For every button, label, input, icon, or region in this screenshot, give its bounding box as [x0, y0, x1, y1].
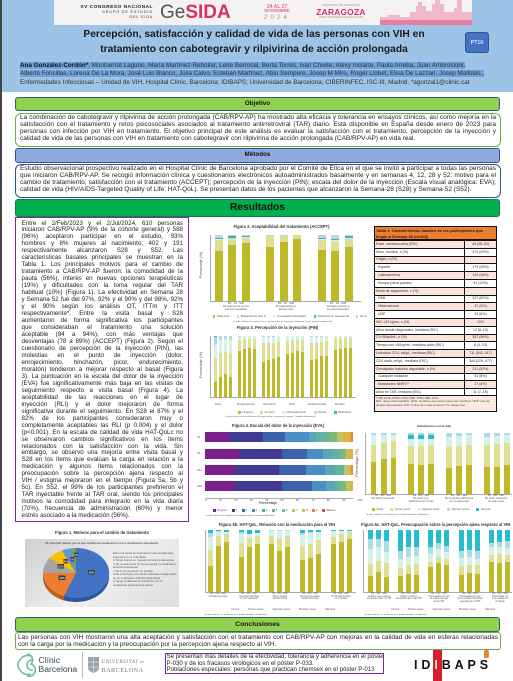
- heading: Conclusiones: Conclusiones: [235, 621, 280, 628]
- figure 4: x axis and row labels: [197, 436, 362, 505]
- table 1 rows: 373 (93%): [472, 250, 489, 254]
- table 1 rows: Sexo, hombre, n (%): [376, 250, 408, 254]
- figure 5a: group labels: satisfecho/a con la vida: [409, 500, 433, 503]
- banner: dates: 24 AL 27: [267, 4, 287, 10]
- table 1 rows: 387 (96%): [472, 335, 489, 339]
- figure 5c: stacked bar chart: [363, 530, 512, 593]
- table 1 rows: Latinoamérica: [378, 273, 400, 277]
- figure 5b: group labels: en el horario: [335, 598, 347, 600]
- figure 5c: group labels: Miedo a contar a: [400, 596, 418, 598]
- figure 3: y axis title: Porcentaje (%): [198, 352, 203, 378]
- poster code PT10: PT10: [471, 40, 483, 46]
- figure 5c: group labels: los demás sobre mi VIH: [367, 598, 391, 600]
- panel: results text: respectivamente alcanzaron S28 y S52. Las: [22, 247, 183, 254]
- figure 5c title: Figura 5c. HAT-QoL. Preocupación sobre la percepción ajena respecto al VIH: [361, 522, 510, 527]
- figure 4: x axis and row labels: T0: [197, 436, 200, 439]
- table 1 header: Tabla 1. Características basales de los participantes que: [376, 228, 483, 232]
- figure 5b: legend: Nunca Pocas veces Algunas veces Muchas veces Siempre: [232, 608, 335, 611]
- figure 3: stacked bar chart: [210, 336, 356, 398]
- figure 3: group labels: Enrojecimiento: [237, 403, 255, 406]
- panel: results text: 5c). En S52, el 99% de los participantes prefirieron el: [22, 484, 183, 491]
- figure 5c: group labels: se enteren de que: [430, 598, 448, 600]
- figure 5a: group labels: Me disfruto de la vida: [372, 497, 394, 500]
- table 1 footnote: *100I,101E,106M/I,108I,138K,179D,188L,230L.: [376, 396, 439, 400]
- table 1 rows: Edad, mediana años (RIC): [376, 242, 417, 246]
- table 1 rows: Mutaciones NNRTI*: [378, 382, 409, 386]
- figure 5b: group labels: B0 · S12 · S28: [272, 593, 288, 595]
- figure 4: horizontal stacked bar chart: [205, 432, 353, 491]
- table 1 rows: CD4 nadir, cél/μL, mediana (RIC): [376, 359, 428, 363]
- figure 3: group labels: Moratón: [335, 403, 345, 406]
- figure 2: stacked bar chart: [210, 235, 361, 302]
- figure 3: group labels: Picor: [289, 403, 295, 406]
- pie chart: 5%: [70, 557, 75, 561]
- panel: results text: desventajas (78 a 89%) (ACCEPT) (Figura 2). Según el: [22, 338, 183, 345]
- figure 5a: group labels: B0 · S12 · S28: [451, 494, 467, 497]
- IDIBAPS wordmark: IDIBAPS: [414, 658, 492, 672]
- figure 5c: group labels: B0 · S12 · S28: [431, 593, 447, 595]
- banner: congress name: DEL SIDA: [129, 15, 153, 19]
- banner: dates: 2024: [264, 14, 290, 21]
- banner: venue: [316, 3, 366, 19]
- figure 5a: footnote: *p valor relativo a la evolución en el tiempo (modelo multinomial): [366, 514, 428, 516]
- panel: results text: Entre el 2/Feb/2023 y el 2/Jul/2024, 610 personas: [22, 220, 183, 226]
- heading: Objetivo: Objetivo: [245, 100, 270, 107]
- panel: results text: tratamiento a CAB/RPV-AP fueron: la comodidad de la: [22, 268, 183, 275]
- banner: venue: WWW.CONGRESOGESIDA.COM: [319, 15, 363, 19]
- figure 5b: group labels: B0 · S12 · S28: [241, 593, 257, 595]
- table 1 rows: Años en TAR, mediana (RIC): [376, 390, 421, 394]
- panel: objective text: calidad de vida de las personas con VIH en tratamiento con cabotegravir con rilpivirina de acción prolongada (CAB/RPV-AP) en vida real.: [20, 135, 415, 142]
- figure 5a: group labels: B0 · S12 · S28: [488, 494, 504, 497]
- panel: results text: y Semana 52 fue del 97%, 92% y el 90% y del 98%, 92%: [22, 296, 183, 303]
- figure 5a: y axis title: Percentage (%): [354, 449, 359, 477]
- figure 2: legend: Totalmente Bastante/más bien sí Ni aceptable/inaceptable Totalmente en desacuerdo No sé: [217, 314, 367, 318]
- figure 3: legend: Ninguna Un poco Moderadamente Mucho Muchísimo: [242, 410, 351, 414]
- figure 4: footnote: *p valor relativo a la evolución en el tiempo sobre la intensidad del dolor: [205, 515, 275, 517]
- panel: results text: 82% de los participantes consideraron muy o: [22, 415, 183, 422]
- panel: results text: pauta (56%), interés en nuevas opciones terapéuticas: [22, 275, 183, 282]
- figure 2: y axis title: Porcentaje (%): [198, 252, 203, 278]
- panel: results text: iniciaron CAB/RPV-AP (9% de la cohorte general) y 588: [22, 226, 183, 233]
- panel: results text: enrojecimiento, hinchazón, picor, endurecimiento,: [22, 359, 183, 366]
- table 1 rows: Años desde diagnóstico, mediana (RIC): [376, 328, 438, 332]
- divider: [81, 652, 84, 678]
- banner: venue: AUDITORIO DE ZARAGOZA: [322, 3, 360, 7]
- figure 5a: group labels: de estar vivo/a: [488, 500, 504, 503]
- pie chart: 19%: [59, 576, 65, 580]
- panel: objective text: [15, 113, 501, 147]
- panel: results text: completamente aceptables las RLI (p 0.004) y el dolor: [22, 422, 183, 429]
- panel: results text: moratón) tendieron a mejorar respecto al basal (Figura: [22, 366, 183, 373]
- figure 5a: stacked bar chart: [365, 433, 512, 495]
- figure 2: group labels: [223, 302, 350, 311]
- banner: dates: NOVIEMBRE: [264, 8, 290, 13]
- authors and affiliations: Enfermedades Infecciosas – Unidad de VIH, Hospital Clínic, Barcelona; IDIBAPS; Universidad de Barcelona; CIBERINFEC, ISC-III, Madrid. *agonzal1@clinic.cat: [20, 79, 469, 86]
- poster code PT10: [465, 32, 489, 53]
- panel: methods text: que iniciaron CAB/RPV-AP. Se recogió información clínica y cuestionarios electrónicos autoadministrados basalmente y en semanas 4, 12, 28 y 52: motivo para el: [20, 172, 496, 179]
- figure 5a: group labels: [372, 494, 507, 503]
- figure 4: row T0: [205, 432, 353, 442]
- panel: results text: motivos la comodidad para integrarlo en la vida diaria: [22, 498, 183, 505]
- panel: results text: VIH / estigma mejoraron en el tiempo (Figura 5a, 5b y: [22, 477, 183, 484]
- figure 5c: group labels: los demás que tengo VIH: [396, 598, 422, 600]
- figure 5c: group labels: B0 · S12 · S28: [462, 593, 478, 595]
- figure 5a: group labels: B0 · S12 · S28: [375, 494, 391, 497]
- table 1 rows: IMC ≥30 kg/m², n (%): [376, 320, 409, 324]
- figure 2: group labels: B0 · S4 · S28: [330, 302, 346, 305]
- panel: results text: seguimiento respecto a visita basal (Figura 4). La: [22, 387, 183, 394]
- figure 5b: footnote: *p valor relativo a la evolución en el tiempo (modelo multinomial): [204, 614, 266, 616]
- figure 5b: group labels: Me ha preocupado: [300, 596, 320, 598]
- congress banner: [54, 0, 472, 25]
- callout: related posters: P-030 y de los fracasos virológicos en el póster P-033.: [166, 660, 314, 667]
- table 1 header: [374, 226, 497, 240]
- panel: methods text: calidad de vida (HIV/AIDS-Targeted Quality of Life: HAT-QoL). Se presentan datos de los pacientes que alcanzaron la Semana-28 (S28) y Semana-52 (S52).: [20, 186, 472, 193]
- figure 4: x axis and row labels: 0 10 20 30 40 50 60 70 80 90 100: [205, 498, 362, 502]
- panel: results text: preocupación sobre la percepción ajena respecto al: [22, 470, 183, 477]
- heading: Objetivo: [15, 97, 500, 111]
- figure 5c: legend: Nunca Pocas veces Algunas veces Muchas veces Siempre: [392, 608, 495, 611]
- icon: Clínic arcs: [17, 653, 36, 678]
- logo: IDIBAPS: [414, 650, 492, 681]
- panel: results text: aceptabilidad de las reacciones en el lugar de: [22, 394, 183, 401]
- table 1 rows: Fracaso virológico previo, n (%): [376, 398, 425, 402]
- figure 5c: group labels: el trabajo: [495, 601, 505, 603]
- table 1 rows: Modo de adquisición, n (%): [376, 289, 418, 293]
- table 1 rows: 45 (38–53): [472, 242, 489, 246]
- heading: Resultados: Resultados: [230, 202, 285, 213]
- callout: related posters: [164, 653, 384, 674]
- figure 5c: group labels: Preocupado por: [492, 596, 508, 598]
- red vertical bar: [433, 650, 442, 681]
- authors and affiliations: Ana González-Cordón*, Montserrat Laguno, María Martínez-Rebollar, Leire Berrocal, Berta Torres, Ivan Chivite, Alexy Inciarte, Paula Arreba, Juan Ambrosioni,: [20, 62, 465, 69]
- table 1 rows: 31 (8%): [474, 374, 487, 378]
- panel: objective text: La combinación de cabotegravir y rilpivirina de acción prolongada (CAB/RPV-AP) ha mostrado alta eficacia y tolerancia en ensayos clínicos, así como mejoría en la: [20, 114, 496, 121]
- panel: results text: cuestionario de percepción de la inyección (PIN), las: [22, 345, 183, 352]
- figure 5a: group labels: Me he sentido satisfecho/a: [445, 497, 473, 500]
- banner: venue: ZARAGOZA: [316, 7, 366, 17]
- panel: results text: (EVA) fue significativamente más baja en las visitas de: [22, 380, 183, 387]
- table 1 rows: 344 (229–477): [469, 359, 492, 363]
- figure 3 title: Figura 3. Percepción de la inyección (PIN): [237, 325, 318, 330]
- table 1 rows: HSH: [378, 296, 385, 300]
- banner: pink skyline: [380, 0, 472, 25]
- figure 5b: group labels: Cuando me tengo: [209, 596, 227, 598]
- heading: Resultados: [15, 199, 500, 217]
- pie chart subtitle: El principal motivo por el que cambia de medicación oral a medicación parenteral:: [45, 540, 159, 544]
- figure 4: x axis and row labels: S4: [197, 452, 200, 455]
- left page edge: [0, 0, 2, 681]
- pie chart legend: ■ Tengo interés en nuevas opciones terapéuticas: [113, 558, 174, 562]
- table 1 rows: 12 (8–19): [473, 328, 488, 332]
- pie chart: 56%: [89, 570, 95, 574]
- figure 5b: group labels: Me he sentido: [273, 596, 287, 598]
- figure 2: footnote: *p valor relativo a la evolución en el tiempo sobre la respuesta "totalmente" basal (modelo multinomial): [233, 320, 332, 322]
- panel: results text: Tabla 1. Los principales motivos para el cambio de: [22, 261, 183, 268]
- figure 5b: group labels: B0 · S12 · S28: [333, 593, 349, 595]
- panel: objective text: satisfacción con el tratamiento y retos psicosociales asociados al tratamiento antirretroviral (TAR) diario. Está disponible en España desde enero de 2023 para: [20, 121, 496, 128]
- panel: conclusions text: con la carga por la medicación y la preocupación por la percepción ajena respecto al VIH.: [18, 641, 276, 648]
- table 1 rows: CV<50cp/mL, n (%): [376, 335, 407, 339]
- heading: Métodos: Métodos: [245, 151, 270, 158]
- figure 5b: group labels: B0 · S12 · S28: [302, 593, 318, 595]
- table 1: baseline characteristics: [374, 226, 497, 412]
- table 1 rows: 711 (543–917): [469, 351, 492, 355]
- figure 5a: group labels: con mi vida actual: [449, 500, 469, 503]
- figure 5b: stacked bar chart: [205, 530, 356, 593]
- figure 5b: group labels: con la medicación: [240, 598, 258, 600]
- figure 5c: group labels: sepa algo de mi VIH: [460, 601, 480, 603]
- logo: Universitat de Barcelona: [82, 652, 145, 678]
- figure 5b title: Figura 5b. HAT-QoL. Relación con la medicación para el VIH: [219, 522, 335, 527]
- panel: methods text: [15, 164, 501, 198]
- panel: results text: y el 90% según los análisis OT, ITTm y ITT: [22, 303, 183, 310]
- banner: congress name: [80, 5, 153, 19]
- table 1 footnote: [374, 395, 497, 412]
- banner: congress name: XV CONGRESO NACIONAL: [80, 5, 153, 10]
- figure 5b: group labels: olvidar una toma: [302, 598, 318, 600]
- figure 5c: group labels: B0 · S12 · S28: [371, 593, 387, 595]
- panel: objective text: personas con infección por VIH en tratamiento. El objetivo principal de este análisis es evaluar la satisfacción con el tratamiento, percepción de la inyección y: [20, 128, 496, 135]
- pie chart legend: ■ Tengo problemas de tolerancia con mi medicación antirretroviral actual: [113, 579, 163, 586]
- university name: BARCELONA: [102, 667, 144, 674]
- figure 2: group labels: los inconvenientes: [327, 308, 349, 311]
- figure 2: group labels: B0 · S4 · S28: [228, 302, 244, 305]
- figure 5a: group labels: B0 · S12 · S28: [413, 494, 429, 497]
- table 1 rows: Linfocitos CD4, cél/μL, mediana (RIC): [376, 351, 435, 355]
- panel: results text: habitual (10%) (Figura 1). La efectividad en Semana 28: [22, 289, 183, 296]
- table 1 rows: 50 (12%): [473, 398, 488, 402]
- panel: results text: TAR inyectable frente al TAR oral, siendo los principales: [22, 491, 183, 498]
- table 1 rows: 17 (4%): [474, 382, 487, 386]
- figure 5b: group labels: desanimado/a: [273, 598, 287, 600]
- callout: related posters: Poblaciones especiales: personas que practican chemsex en el póster P-013: [166, 666, 374, 673]
- figure 2: group labels: Mi tratamiento es una: [223, 305, 249, 308]
- panel: results text: inyección (RLI) y el dolor mejoraron de forma: [22, 401, 183, 408]
- figure 2: group labels: Ventajas superan a: [326, 305, 350, 308]
- figure 5b: group labels: B0 · S12 · S28: [210, 593, 226, 595]
- logo: Clínic Barcelona: [17, 653, 78, 678]
- panel: results text: medicación y algunos ítems relacionados con la: [22, 463, 183, 470]
- figure 5c: group labels: si se enteran en: [492, 598, 508, 600]
- heading: Conclusiones: [15, 617, 500, 632]
- figure 5c: group labels: B0 · S12 · S28: [401, 593, 417, 595]
- table 1 footnote: RIC: rango intercuartílico; HSH: hombres que tienen sexo con hombres; UDP: uso de drogas parenterales; IMC: Índice de masa corporal; CV: carga viral: [376, 399, 489, 407]
- table 1 rows: 211 (52%): [473, 367, 488, 371]
- figure 2: group labels: B0 · S4 · S28: [278, 302, 294, 305]
- authors and affiliations: [20, 62, 484, 86]
- banner: GeSIDA wordmark: GeSIDA: [160, 2, 231, 23]
- pie chart legend: ■ Me preocupan los efectos adversos a largo plazo de mi medicación antirretroviral actual: [113, 572, 176, 580]
- figure 5c: group labels: tengo VIH: [434, 601, 444, 603]
- figure 5b: group labels: He tomado la dosis: [331, 596, 351, 598]
- table 1 rows: 24 (6%): [474, 312, 487, 316]
- figure 2: group labels: Mi tratamiento es: [276, 305, 296, 308]
- pie chart legend: ■ Me lo ha propuesto mi médico: [113, 568, 153, 572]
- figure 5a title: Satisfacción con la vida: [417, 424, 451, 428]
- panel: results text: (96%) aceptaron participar en el estudio, 93%: [22, 233, 183, 240]
- panel: results text: respectivamente*. Entre la visita basal y S28: [22, 310, 183, 317]
- title: Percepción, satisfacción y calidad de vida de las personas con VIH en: [83, 29, 425, 40]
- panel: results text: que consideraban el tratamiento una solución: [22, 324, 183, 331]
- table 1 rows: 51 (13%): [473, 281, 488, 285]
- pie chart: 8%: [64, 559, 68, 563]
- university name: UNIVERSITAT DE: [102, 659, 145, 665]
- figure 5a: group labels: Me siento muy: [413, 497, 429, 500]
- panel: results text: S28 en los ítems que evalúan la carga en relación a la: [22, 456, 183, 463]
- Clínic Barcelona wordmark: Clínic: [38, 654, 60, 664]
- figure 4: row S12: [205, 465, 353, 475]
- figure 5a: group labels: Me siento contento/a: [485, 497, 507, 500]
- figure 4: x axis and row labels: S28: [197, 485, 202, 488]
- panel: results text: [15, 217, 189, 522]
- Clínic Barcelona wordmark: Barcelona: [38, 664, 77, 674]
- table 1 rows: 327 (82%): [472, 296, 489, 300]
- panel: methods text: cambio de tratamiento; satisfacción con el tratamiento (ACCEPT); percepción de la inyección (PIN); escala del dolor de la inyección (Escala visual analógica: EVA);: [20, 179, 496, 186]
- banner: dates: [264, 4, 290, 21]
- panel: methods text: Estudio observacional prospectivo realizado en el Hospital Clínic de Barcelona aprobado por el Comité de Ética en el que se invitó a participar a todas las personas: [20, 165, 496, 172]
- panel: results text: embargo, se observó una mejoría entre visita basal y: [22, 449, 183, 456]
- table 1 rows: 37 (9%): [474, 304, 487, 308]
- panel: results text: aumentaron de forma significativa los participantes: [22, 317, 183, 324]
- pie chart: 2%: [74, 553, 79, 557]
- pie chart: 10%: [58, 564, 64, 568]
- table 1 rows: 8 (3–13): [474, 343, 487, 347]
- figure 5c: group labels: Limita lo que cuento a: [368, 596, 390, 598]
- panel: results text: significativa durante el seguimiento. En S28 el 87% y el: [22, 408, 183, 415]
- panel: results text: (70%), frecuencia de administración (60%) y menor: [22, 505, 183, 512]
- panel: results text: 3). La puntuación en la escala del dolor de la inyección: [22, 373, 183, 380]
- table 1 rows: 11 (7–15): [473, 390, 488, 394]
- figure 5b: group labels: He tenido dificultad: [239, 596, 259, 598]
- icon: university shield: [88, 657, 99, 673]
- panel: results text: (19%) y dificultades con la toma regular del TAR: [22, 282, 183, 289]
- figure 1 title: Figura 1. Motivos para el cambio de tratamiento: [55, 530, 149, 535]
- figure 5c: group labels: B0 · S12 · S28: [492, 593, 508, 595]
- heading: Métodos: [15, 148, 500, 162]
- panel: results text: estrés asociado a la medicación (56%).: [22, 512, 130, 519]
- panel: conclusions text: [15, 632, 501, 650]
- pie chart legend: ■ Es una pauta de tratamiento más sencilla para integrarla en mi vida diaria: [113, 551, 173, 558]
- figure 4 title: Figura 4. Escala del dolor de la inyección (EVA): [232, 423, 324, 428]
- authors and affiliations: Alberto Foncillas, Lorena De La Mora, José Luis Blanco, Júlia Calvo, Esteban Martínez, Abiu Sempere, Josep M Miro, Roger Llobet, Elisa De Lazzari, Josep Mallolas.,: [20, 70, 484, 77]
- figure 4: x axis and row labels: Porcentaje: [259, 501, 277, 505]
- table 1 rows: Europa (otros países): [378, 281, 412, 285]
- pie chart: [43, 548, 110, 602]
- table 1 rows: 10%: [477, 320, 484, 324]
- figure 2: group labels: fácil de usar: [279, 308, 293, 311]
- panel: results text: se observaron cambios significativos en los ítems: [22, 436, 183, 443]
- figure 5a: legend: Nada Pocas veces Algunas veces Muchas veces Siempre: [376, 508, 491, 510]
- panel: conclusions text: Las personas con VIH mostraron una alta aceptación y satisfacción con el tratamiento con CAB/RPV-AP con mejoras en la calidad de vida en esferas relacionadas: [18, 634, 498, 640]
- figure 2: group labels: solución aceptable: [225, 308, 247, 311]
- pie chart legend: [113, 551, 176, 586]
- figure 3: footnote: *p valor relativo a la evolución en el tiempo sobre la respuesta "ninguna" (modelo multinomial): [224, 416, 316, 418]
- university name: [102, 659, 145, 674]
- figure 5c: group labels: Preocupado por que: [429, 596, 449, 598]
- callout: related posters: Se presentan más detalles de la efectividad, tolerancia y adherencia en el póster: [166, 653, 384, 660]
- banner: congress name: GRUPO DE ESTUDIO: [102, 10, 153, 14]
- table 1 rows: 140 (35%): [472, 273, 489, 277]
- figure 4: legend: Ninguno 1 2 3 4 5 6 7 8 9 Máximo: [217, 509, 336, 512]
- table 1 rows: Origen, n (%): [376, 257, 397, 261]
- table 1 rows: Cualquier mutación: [378, 374, 408, 378]
- table 1 header: llegan a Semana 28 (n=402): [376, 234, 428, 238]
- figure 4: x axis and row labels: S12: [197, 469, 202, 472]
- figure 3: group labels: [215, 403, 345, 406]
- figure 3: group labels: Hinchazón: [263, 403, 276, 406]
- figure 3: group labels: Endurecimiento: [308, 403, 327, 406]
- panel: results text: hombres y 8% mujeres al nacimiento; 402 y 191: [22, 240, 183, 247]
- title: tratamiento con cabotegravir y rilpivirina de acción prolongada: [100, 44, 408, 55]
- pie chart legend: ■ Me cuesta tomar de forma regular mi medicación antirretroviral actual: [113, 562, 176, 569]
- Clínic Barcelona wordmark: [38, 654, 78, 674]
- table 1 rows: 179 (45%): [472, 265, 489, 269]
- header band: [0, 0, 513, 92]
- table 1 rows: [374, 240, 497, 402]
- panel: results text: (p<0.001). En la escala de calidad de vida HAT-QoLc no: [22, 429, 183, 436]
- panel: results text: relacionados con la satisfacción con la vida. Sin: [22, 442, 183, 450]
- figure 5b: group labels: [209, 592, 351, 600]
- table 1 rows: Genotipado histórico disponible, n (%): [376, 367, 435, 371]
- figure 1: pie chart panel: [25, 539, 179, 607]
- table 1 rows: UDP: [378, 312, 385, 316]
- table 1 rows: Tiempo con <50cp/mL, mediana años (RIC): [376, 343, 444, 347]
- figure 5c: footnote: *p valor relativo a la evolución en el tiempo (modelo multinomial): [364, 614, 426, 616]
- figure 5c: group labels: Preocupado por que: [460, 596, 480, 598]
- figure 5c: group labels: [366, 592, 508, 603]
- panel: results text: molestias en el punto de inyección (dolor,: [22, 352, 183, 359]
- panel: results text: características basales principales se muestran en la: [22, 254, 183, 261]
- figure 5c: group labels: la comunidad / sociedad: [458, 598, 482, 600]
- figure 4: row S28: [205, 481, 353, 491]
- title: [83, 29, 425, 55]
- figure 3: group labels: Dolor: [215, 403, 221, 406]
- figure 4: row S4: [205, 449, 353, 459]
- table 1 rows: Heterosexual: [378, 304, 399, 308]
- orange mark: [484, 650, 489, 658]
- figure 2 title: Figura 2. Aceptabilidad del tratamiento (ACCEPT): [233, 224, 330, 229]
- panel: results text: aceptable (84 a 94%), con más ventajas que: [22, 331, 183, 338]
- table 1 rows: España: [378, 265, 390, 269]
